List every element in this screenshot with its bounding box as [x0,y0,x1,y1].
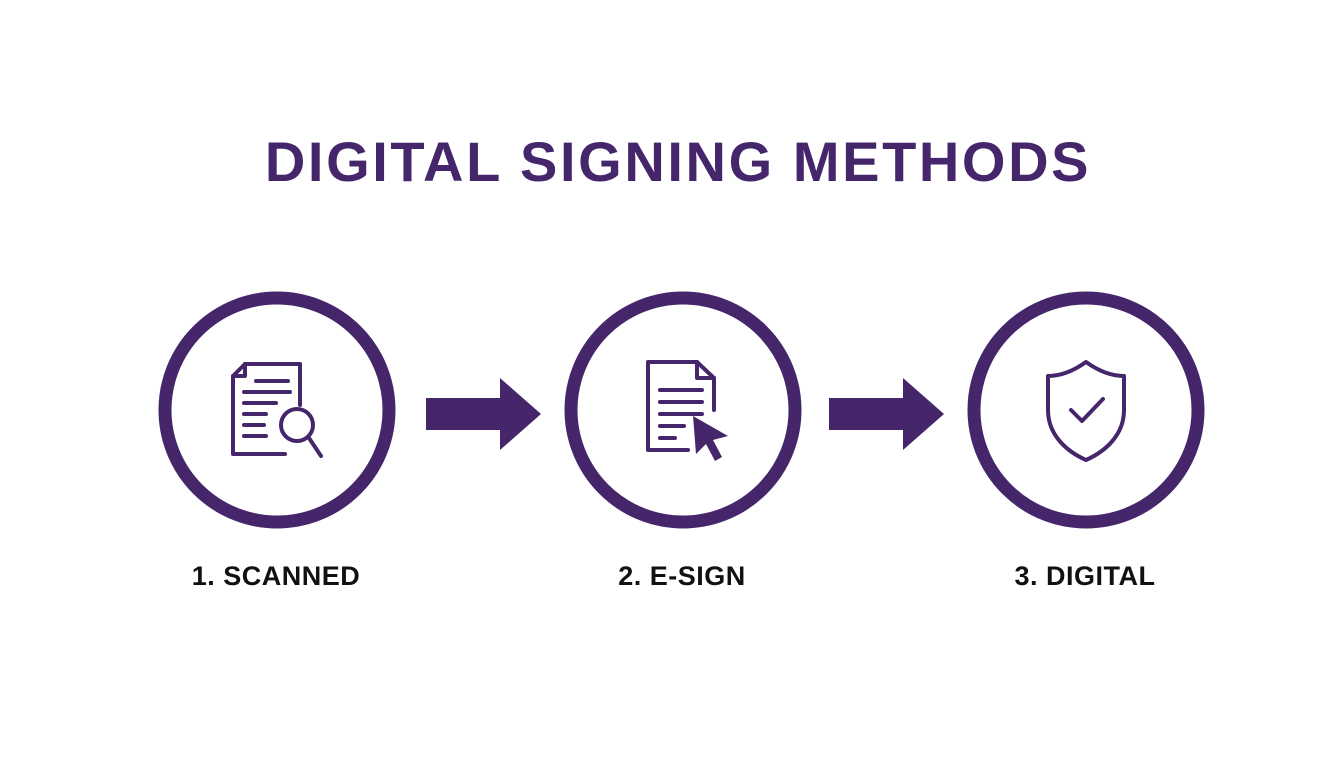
step 1 circle with scanned document icon [165,298,389,522]
label 2: 2. E-SIGN [618,561,746,591]
label 1: 1. SCANNED [192,561,360,591]
step 2 circle with e-sign document icon [571,298,795,522]
arrow 2 [829,378,944,450]
arrow 1 [426,378,541,450]
label 3: 3. DIGITAL [1014,561,1156,591]
title: DIGITAL SIGNING METHODS [265,130,1091,193]
step 3 circle with shield check icon [974,298,1198,522]
